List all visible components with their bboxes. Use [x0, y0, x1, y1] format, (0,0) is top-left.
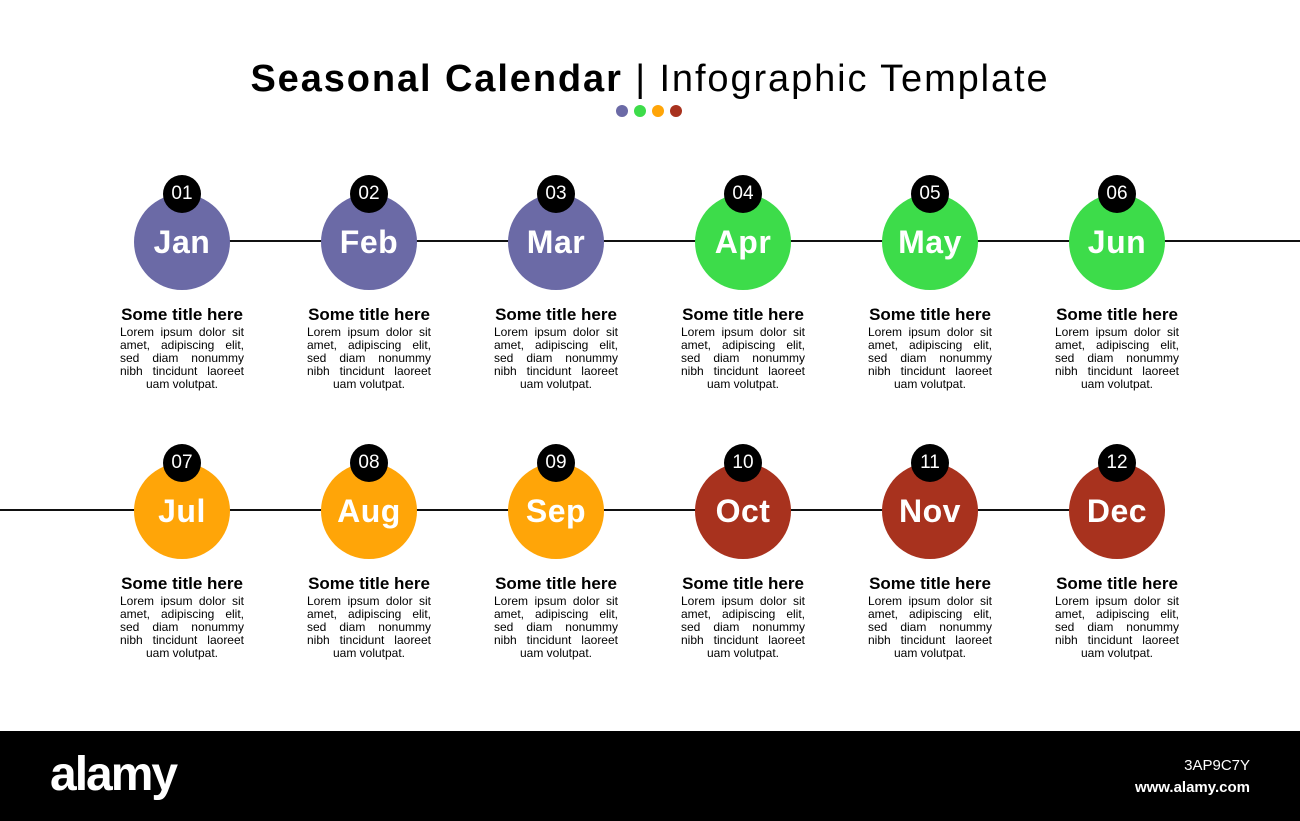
month: May: [868, 175, 992, 391]
month: Sep: [494, 444, 618, 660]
month: Feb: [307, 175, 431, 391]
image id: 3AP9C7Y: [1184, 757, 1250, 774]
text: Lorem ipsum dolor sit amet, adipiscing elit, sed diam nonummy nibh tincidunt laoreet uam volutpat.: [120, 325, 244, 391]
text: Lorem ipsum dolor sit amet, adipiscing elit, sed diam nonummy nibh tincidunt laoreet uam volutpat.: [494, 325, 618, 391]
text: Some title here: [869, 305, 991, 324]
month: Dec: [1055, 444, 1179, 660]
text: Lorem ipsum dolor sit amet, adipiscing elit, sed diam nonummy nibh tincidunt laoreet uam volutpat.: [1055, 594, 1179, 660]
text: Lorem ipsum dolor sit amet, adipiscing elit, sed diam nonummy nibh tincidunt laoreet uam volutpat.: [681, 594, 805, 660]
month: Jan: 01: [171, 183, 193, 204]
text: Some title here: [682, 305, 804, 324]
text: Some title here: [495, 305, 617, 324]
text: Some title here: [308, 305, 430, 324]
month: Sep: 09: [545, 452, 567, 473]
text: Aug: [337, 493, 401, 529]
text: Nov: [899, 493, 961, 529]
footer bar: [0, 731, 1300, 821]
text: Lorem ipsum dolor sit amet, adipiscing elit, sed diam nonummy nibh tincidunt laoreet uam volutpat.: [681, 325, 805, 391]
text: Some title here: [1056, 574, 1178, 593]
month: May: 05: [919, 183, 941, 204]
text: Lorem ipsum dolor sit amet, adipiscing elit, sed diam nonummy nibh tincidunt laoreet uam volutpat.: [868, 325, 992, 391]
month: Jul: [120, 444, 244, 660]
text: Some title here: [495, 574, 617, 593]
month: Nov: [868, 444, 992, 660]
text: Sep: [526, 493, 586, 529]
text: Some title here: [869, 574, 991, 593]
text: Lorem ipsum dolor sit amet, adipiscing elit, sed diam nonummy nibh tincidunt laoreet uam volutpat.: [868, 594, 992, 660]
text: May: [898, 224, 962, 260]
text: Lorem ipsum dolor sit amet, adipiscing elit, sed diam nonummy nibh tincidunt laoreet uam volutpat.: [307, 325, 431, 391]
text: Feb: [340, 224, 398, 260]
month: Oct: [681, 444, 805, 660]
month: Oct: 10: [732, 452, 754, 473]
month: Apr: [681, 175, 805, 391]
text: Mar: [527, 224, 585, 260]
month: Aug: 08: [358, 452, 380, 473]
month: Jul: 07: [171, 452, 193, 473]
month: Jun: 06: [1106, 183, 1128, 204]
decorative dots: [616, 105, 682, 117]
text: Lorem ipsum dolor sit amet, adipiscing elit, sed diam nonummy nibh tincidunt laoreet uam volutpat.: [1055, 325, 1179, 391]
text: Some title here: [308, 574, 430, 593]
text: Oct: [716, 493, 770, 529]
month: Jun: [1055, 175, 1179, 391]
month: Mar: [494, 175, 618, 391]
text: Some title here: [1056, 305, 1178, 324]
text: Apr: [715, 224, 771, 260]
text: Jul: [158, 493, 206, 529]
text: Lorem ipsum dolor sit amet, adipiscing elit, sed diam nonummy nibh tincidunt laoreet uam volutpat.: [494, 594, 618, 660]
text: Dec: [1087, 493, 1147, 529]
month: Mar: 03: [545, 183, 567, 204]
month: Dec: 12: [1106, 452, 1128, 473]
month: Apr: 04: [732, 183, 754, 204]
text: Lorem ipsum dolor sit amet, adipiscing elit, sed diam nonummy nibh tincidunt laoreet uam volutpat.: [120, 594, 244, 660]
month: Feb: 02: [358, 183, 380, 204]
text: Lorem ipsum dolor sit amet, adipiscing elit, sed diam nonummy nibh tincidunt laoreet uam volutpat.: [307, 594, 431, 660]
text: Some title here: [121, 574, 243, 593]
image id: www.alamy.com: [1135, 779, 1250, 796]
text: Some title here: [682, 574, 804, 593]
image id: [1135, 757, 1250, 796]
month: Aug: [307, 444, 431, 660]
text: Some title here: [121, 305, 243, 324]
text: Jun: [1088, 224, 1146, 260]
month: Jan: [120, 175, 244, 391]
text: Jan: [154, 224, 210, 260]
month: Nov: 11: [920, 452, 940, 473]
logo text: alamy: [50, 748, 176, 801]
title: Seasonal Calendar | Infographic Template: [250, 58, 1050, 100]
